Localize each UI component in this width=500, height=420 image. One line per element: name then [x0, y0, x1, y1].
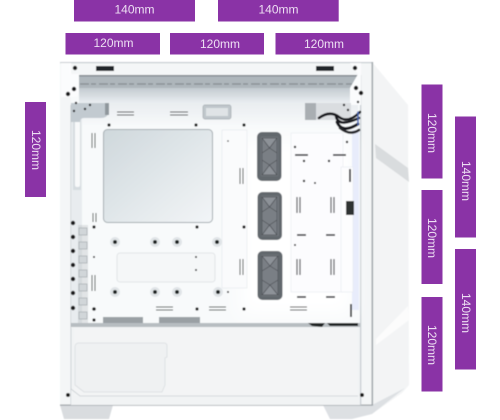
label: top 120mm middle: 120mm [200, 37, 240, 51]
right mounting panels [222, 130, 247, 288]
fan mount 3 [258, 251, 282, 300]
power supply shroud [71, 317, 360, 405]
label: front 120mm top [422, 84, 442, 178]
label: top 120mm left: 120mm [93, 36, 134, 50]
label: front 120mm bottom [422, 297, 442, 392]
label: top 140mm left: 140mm [114, 2, 155, 16]
right front panel [372, 62, 409, 414]
motherboard window [104, 130, 212, 222]
label: top 120mm right: 120mm [304, 37, 344, 51]
fan mount 1 [257, 132, 282, 181]
standoffs [110, 237, 229, 297]
label: front 120mm middle: 120mm [425, 218, 439, 258]
label: front 140mm bottom: 140mm [459, 293, 473, 333]
label: top 120mm left [66, 33, 160, 54]
label: rear 120mm [25, 102, 46, 197]
label: front 120mm top: 120mm [425, 113, 439, 153]
computer case [60, 62, 409, 419]
cable tie slots [92, 112, 334, 310]
radiator bracket panel [117, 253, 215, 282]
label: top 120mm middle [170, 33, 264, 54]
interior back plate [71, 75, 360, 326]
label: rear 120mm: 120mm [29, 130, 43, 170]
label: front 120mm middle [422, 190, 442, 284]
label: top 140mm right: 140mm [258, 2, 299, 16]
cable window [305, 103, 351, 120]
blue-white glow area [240, 140, 352, 315]
label: top 140mm left [74, 0, 195, 22]
label: top 140mm right [218, 0, 339, 22]
case body [60, 62, 372, 406]
label: front 140mm bottom [455, 249, 476, 370]
top bay [61, 63, 361, 125]
cable bundle [319, 112, 360, 133]
label: front 140mm top [455, 116, 476, 238]
mounting holes [66, 66, 364, 402]
label: top 120mm right [276, 33, 370, 54]
fan mount 2 [258, 192, 282, 240]
top bracket logos [96, 66, 334, 71]
bottom feet [60, 388, 405, 419]
expansion slots [79, 228, 87, 319]
label: front 140mm top: 140mm [459, 161, 473, 201]
label: front 120mm bottom: 120mm [425, 325, 439, 365]
rear vent column [71, 103, 109, 326]
